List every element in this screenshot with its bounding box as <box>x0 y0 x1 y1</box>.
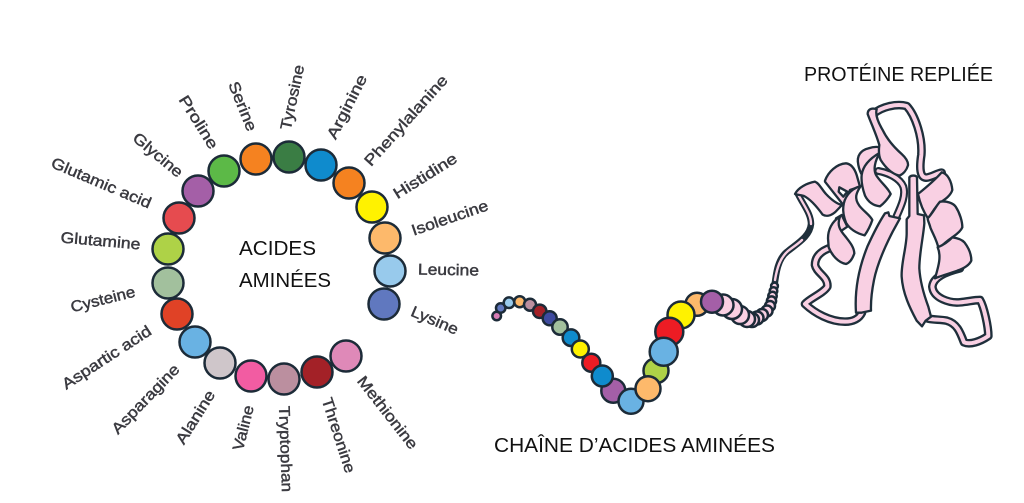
amino acid labels: Glutamic acid <box>48 155 154 212</box>
heading: protéine repliée: PROTÉINE REPLIÉE <box>804 63 993 86</box>
amino acid labels: Phenylalanine <box>361 72 452 170</box>
heading: chaîne d'acides aminés: CHAÎNE D’ACIDES AMINÉES <box>494 434 775 457</box>
folded protein ribbon <box>795 105 988 343</box>
amino acid labels: Aspartic acid <box>59 323 155 393</box>
amino acid labels: Lysine <box>408 303 461 339</box>
amino acid labels: Arginine <box>324 72 371 142</box>
amino acid labels: Glutamine <box>60 230 141 253</box>
amino acid chain <box>492 283 778 414</box>
amino acid ring <box>152 142 406 394</box>
amino acid labels: Cysteine <box>69 284 137 316</box>
amino acid labels: Asparagine <box>109 361 183 438</box>
ribbon bands <box>795 109 971 326</box>
amino acid labels: Threonine <box>318 396 358 475</box>
amino acid labels: Leucine <box>418 261 479 280</box>
amino acid labels: Tyrosine <box>278 63 308 132</box>
amino acid labels: Methionine <box>353 373 421 453</box>
amino acid labels: Alanine <box>173 388 219 447</box>
amino acid labels: Valine <box>230 404 258 452</box>
amino acid labels: Serine <box>224 79 260 134</box>
amino acid labels: Tryptophan <box>275 406 295 492</box>
heading: acides aminés <box>239 238 331 292</box>
amino acid labels: Proline <box>175 93 221 152</box>
tubes: connecting loops <box>805 105 988 343</box>
heading: acides aminés: ACIDES <box>239 238 316 260</box>
amino acid labels: Histidine <box>390 150 461 203</box>
amino acid labels: Glycine <box>129 130 186 181</box>
protein tail: thin tube linking chain to fold <box>774 194 811 290</box>
heading: acides aminés: AMINÉES <box>239 269 331 292</box>
amino acid labels: Isoleucine <box>409 197 491 240</box>
amino acid labels <box>48 63 491 492</box>
